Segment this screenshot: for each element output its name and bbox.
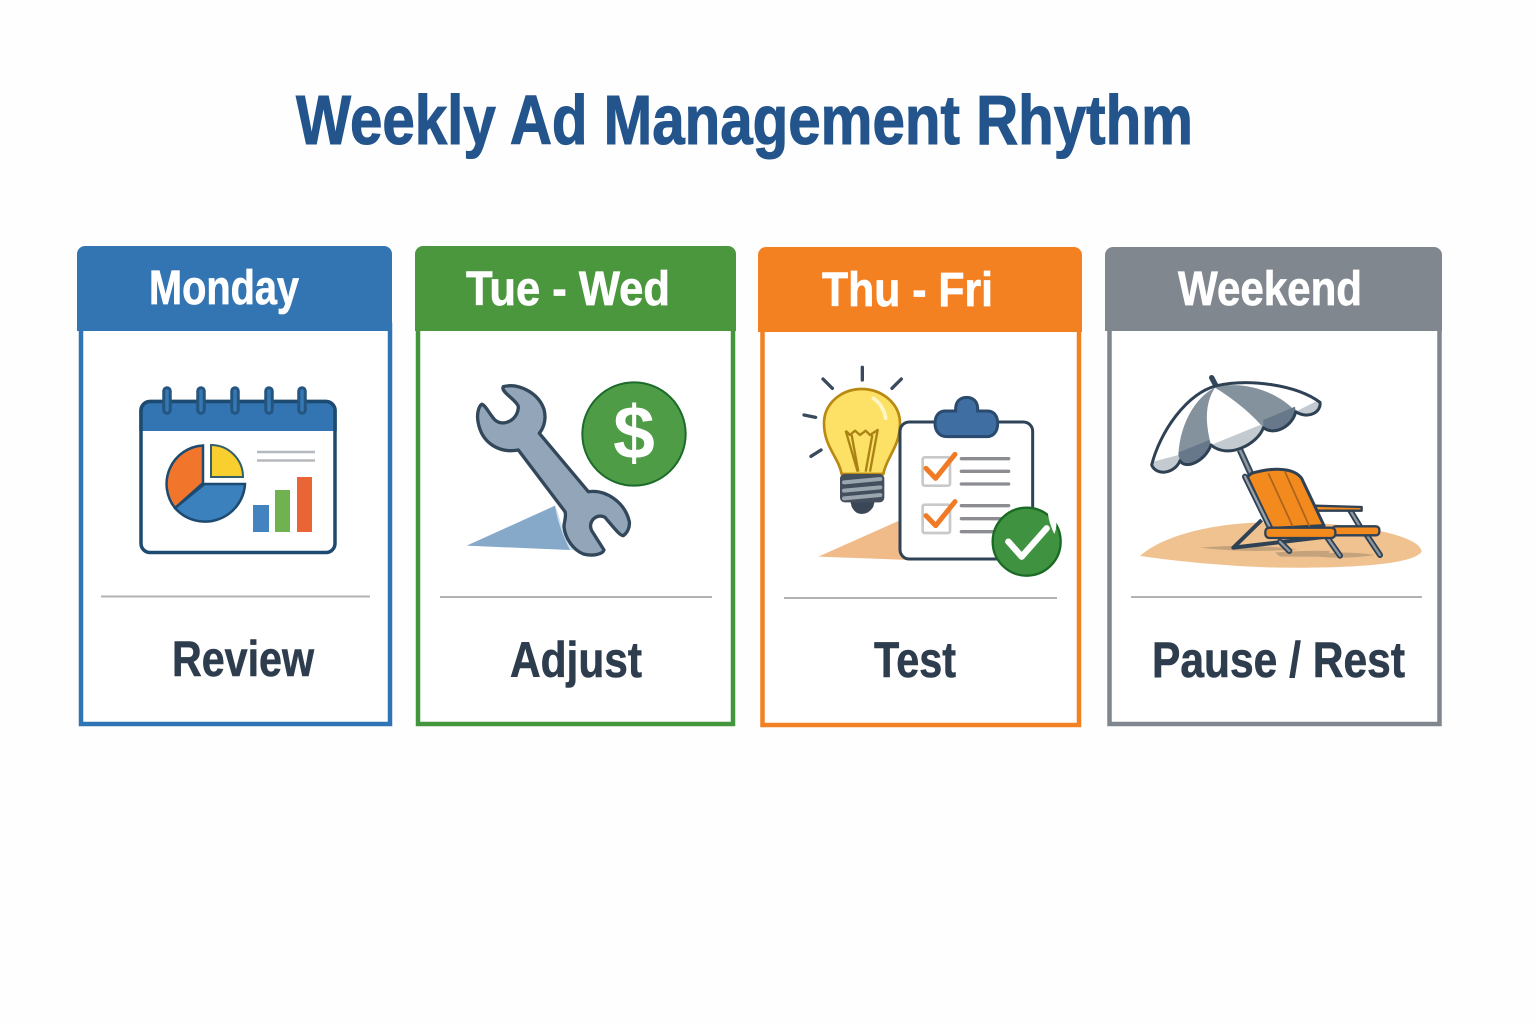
day label: Weekend: Weekend: [1178, 263, 1362, 316]
panel: Thu - Fri: [758, 247, 1082, 725]
panel: Weekend: [1105, 247, 1442, 724]
day label: Thu - Fri: Thu - Fri: [822, 264, 993, 317]
day label: Monday: Monday: [149, 262, 299, 315]
header: Weekend: [1105, 247, 1442, 331]
action label: Test: Test: [874, 632, 956, 688]
icon: wrench and dollar coin: $: [613, 390, 655, 474]
panel: Tue - Wed: [415, 246, 736, 724]
header: Thu - Fri: [758, 247, 1082, 332]
panel: Monday: [77, 246, 392, 724]
action label: Pause / Rest: Pause / Rest: [1152, 632, 1405, 688]
divider: [1131, 596, 1422, 598]
icon: beach umbrella and lounge chair: [1140, 378, 1422, 568]
header: Monday: [77, 246, 392, 331]
action label: Review: Review: [172, 631, 314, 687]
title: Weekly Ad Management Rhythm: [296, 81, 1193, 159]
divider: [101, 596, 370, 598]
day label: Tue - Wed: Tue - Wed: [466, 263, 670, 316]
divider: [784, 597, 1057, 599]
divider: [440, 596, 712, 598]
header: Tue - Wed: [415, 246, 736, 331]
action label: Adjust: Adjust: [510, 632, 642, 688]
icon: wrench and dollar coin: [467, 382, 686, 555]
icon: calendar with charts: [141, 391, 335, 552]
icon: light bulb and checklist: [804, 367, 1061, 576]
